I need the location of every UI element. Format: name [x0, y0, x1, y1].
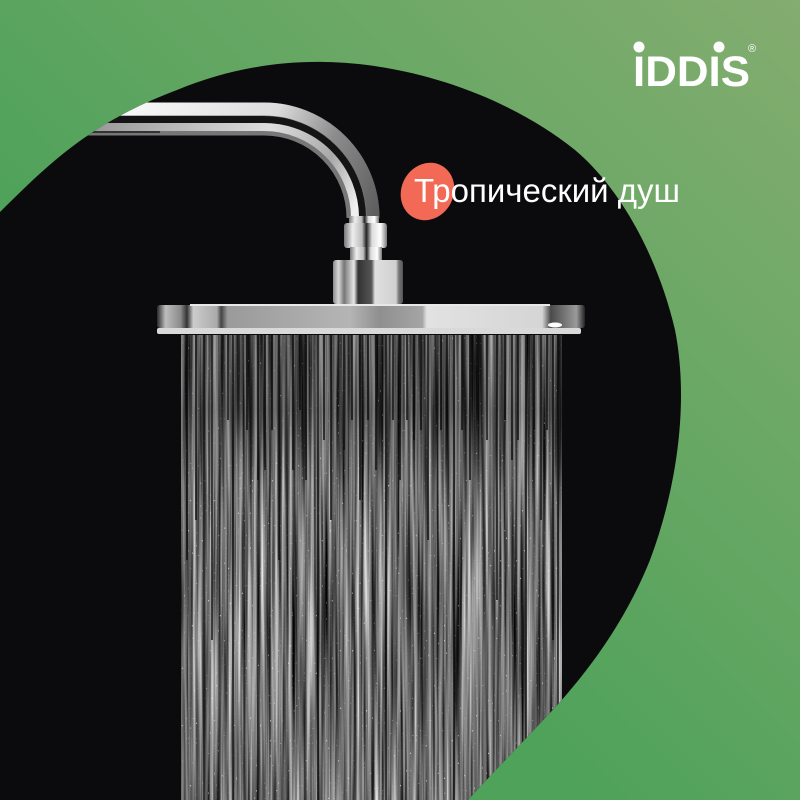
shower head plate: [157, 304, 585, 334]
logo: iddis: ®: [748, 43, 756, 55]
logo: iddis: IDDIS: [633, 48, 750, 96]
shower head cap: [333, 260, 403, 304]
falling water: [181, 335, 562, 800]
shower arm: [60, 109, 373, 218]
swivel collar: [344, 216, 387, 260]
label: tropical shower: Тропический душ: [414, 172, 680, 209]
coral accent blob: [391, 153, 464, 230]
fade at the top of the water: [181, 335, 562, 485]
black photo shape: [0, 62, 681, 800]
dark gaps between water streams: [187, 335, 558, 800]
